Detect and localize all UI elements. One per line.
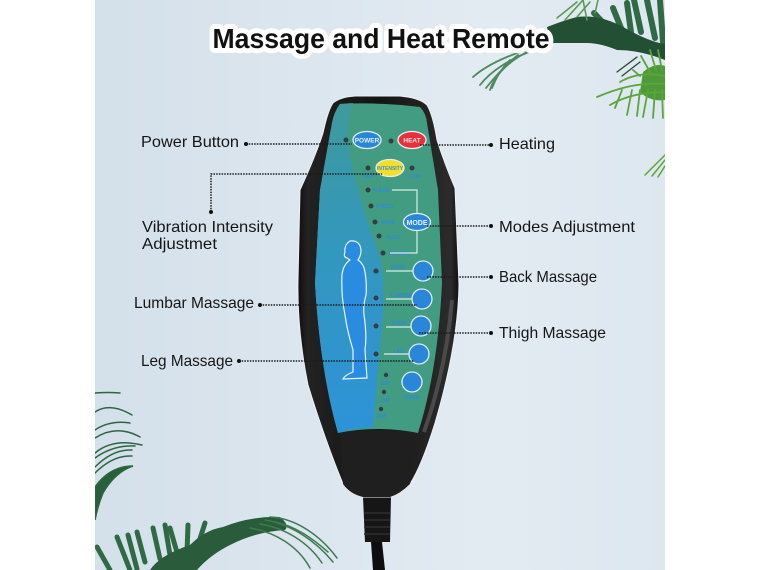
callout: Vibration Intensity Adjustment: Adjustmet (142, 236, 218, 253)
indicator dots (344, 138, 414, 411)
callout: Back Massage (427, 269, 597, 286)
callout: Power Button (141, 134, 352, 151)
MODE button: MODE (406, 220, 428, 227)
mode bracket lines (384, 190, 417, 354)
small panel labels: PRESS (376, 204, 394, 210)
small panel labels: HIGH (362, 174, 375, 180)
title: Massage and Heat Remote (212, 23, 550, 54)
massage round buttons (402, 261, 433, 392)
small panel labels: LOW (409, 174, 421, 180)
POWER button: POWER (355, 138, 380, 144)
callout: Vibration Intensity Adjustment (142, 174, 382, 253)
small panel labels: TIMER (404, 395, 420, 401)
small panel labels: PULSE (373, 188, 390, 194)
callout: Back Massage: Back Massage (499, 269, 597, 286)
remote outer body (298, 96, 459, 497)
HEAT button (398, 132, 426, 148)
small panel labels: BACK (391, 265, 406, 271)
callout: Heating (420, 136, 555, 153)
small panel labels: THIGH (391, 321, 407, 327)
cable (371, 542, 385, 570)
INTENSITY button (376, 160, 404, 176)
small panel labels: AUTO (386, 235, 400, 241)
small panel labels: LUMBAR (391, 293, 413, 299)
callout: Thigh Massage (419, 325, 606, 342)
callout: Heating: Heating (499, 136, 555, 153)
remote lower cap (340, 430, 415, 497)
callout: Lumbar Massage: Lumbar Massage (134, 295, 254, 312)
callout: Vibration Intensity Adjustment: Vibration Intensity (142, 219, 273, 236)
palm leaves left (95, 392, 142, 520)
callout: Lumbar Massage (134, 295, 417, 312)
background wall (95, 0, 665, 570)
small panel labels: 15M (380, 381, 390, 387)
palm leaves bottom (97, 517, 337, 570)
callout: Modes Adjustment (427, 219, 636, 236)
cable strain relief (363, 497, 391, 542)
callout: Power Button: Power Button (141, 134, 239, 151)
small panel labels: LEG (394, 349, 404, 355)
small panel labels: 30M (380, 398, 390, 404)
remote right rim highlight (424, 300, 452, 432)
panel blue (315, 103, 384, 433)
callout: Thigh Massage: Thigh Massage (499, 325, 606, 342)
human body figure (342, 241, 367, 379)
callout: Leg Massage (141, 353, 414, 370)
small panel labels (362, 174, 421, 420)
small panel labels: NORMAL (389, 251, 411, 257)
small panel labels: WAVE (381, 220, 396, 226)
HEAT button: HEAT (403, 138, 421, 144)
MODE button (404, 214, 430, 230)
callout: Leg Massage: Leg Massage (141, 353, 233, 370)
POWER button (353, 132, 381, 148)
small panel labels: 60M (376, 414, 386, 420)
remote control (298, 96, 459, 570)
panel green (315, 103, 442, 433)
palm leaves top right (473, 0, 665, 177)
callout: Modes Adjustment: Modes Adjustment (499, 219, 636, 236)
INTENSITY button: INTENSITY (377, 166, 404, 172)
